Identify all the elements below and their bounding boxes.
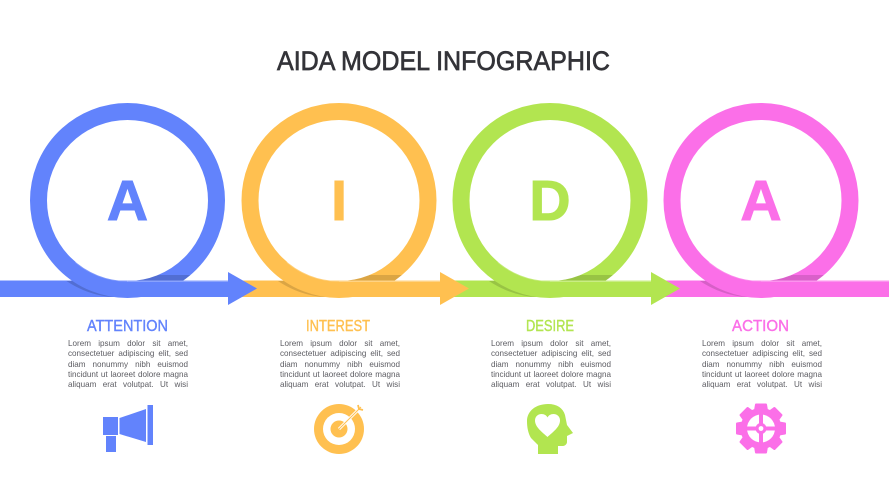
heading: interest: INTEREST <box>306 318 370 335</box>
letter: I: I <box>331 169 347 233</box>
text: desire: aliquam erat volutpat. Ut wisi <box>491 380 611 389</box>
text: interest: diam nonummy nibh euismod <box>280 360 400 368</box>
text: desire: consectetuer adipiscing elit, sed <box>491 349 611 358</box>
text: interest: Lorem ipsum dolor sit amet, <box>280 339 400 348</box>
text: attention: Lorem ipsum dolor sit amet, <box>68 339 188 348</box>
icon: gear <box>737 404 785 452</box>
text: action: aliquam erat volutpat. Ut wisi <box>702 380 822 389</box>
text: attention: diam nonummy nibh euismod <box>68 360 188 368</box>
text: attention: tincidunt ut laoreet dolore magna <box>68 370 188 379</box>
text: action: tincidunt ut laoreet dolore magna <box>702 370 822 379</box>
title: AIDA MODEL INFOGRAPHIC <box>277 46 610 76</box>
letter: A: A <box>107 169 148 233</box>
text: attention: aliquam erat volutpat. Ut wisi <box>68 380 188 389</box>
text: action: Lorem ipsum dolor sit amet, <box>702 339 822 348</box>
ring and arrow: interest <box>235 104 469 305</box>
heading: action: ACTION <box>732 318 789 335</box>
icon: megaphone <box>103 405 153 452</box>
text: action <box>702 339 823 391</box>
text: attention: consectetuer adipiscing elit, sed <box>68 349 188 358</box>
panel: action <box>657 104 889 452</box>
text: desire: diam nonummy nibh euismod <box>491 360 611 368</box>
text: desire <box>491 339 612 391</box>
text: interest: aliquam erat volutpat. Ut wisi <box>280 380 400 389</box>
ring and arrow: action <box>657 104 889 298</box>
text: interest: tincidunt ut laoreet dolore magna <box>280 370 400 379</box>
text: interest: consectetuer adipiscing elit, sed <box>280 349 400 358</box>
text: interest <box>280 339 401 391</box>
text: action: consectetuer adipiscing elit, sed <box>702 349 822 358</box>
text: desire: Lorem ipsum dolor sit amet, <box>491 339 611 348</box>
ring and arrow: attention <box>0 104 257 305</box>
heading: desire: DESIRE <box>526 318 574 335</box>
heading: attention: ATTENTION <box>87 318 168 335</box>
icon: target <box>314 404 364 454</box>
letter: A: A <box>740 169 782 233</box>
text: desire: tincidunt ut laoreet dolore magna <box>491 370 611 379</box>
icon: head with heart <box>527 404 573 454</box>
panel: desire <box>446 104 680 454</box>
text: action: diam nonummy nibh euismod <box>702 360 822 368</box>
letter: D: D <box>529 169 571 233</box>
ring and arrow: desire <box>446 104 680 305</box>
panel: attention <box>0 104 257 452</box>
panel: interest <box>235 104 469 454</box>
text: attention <box>68 339 189 391</box>
